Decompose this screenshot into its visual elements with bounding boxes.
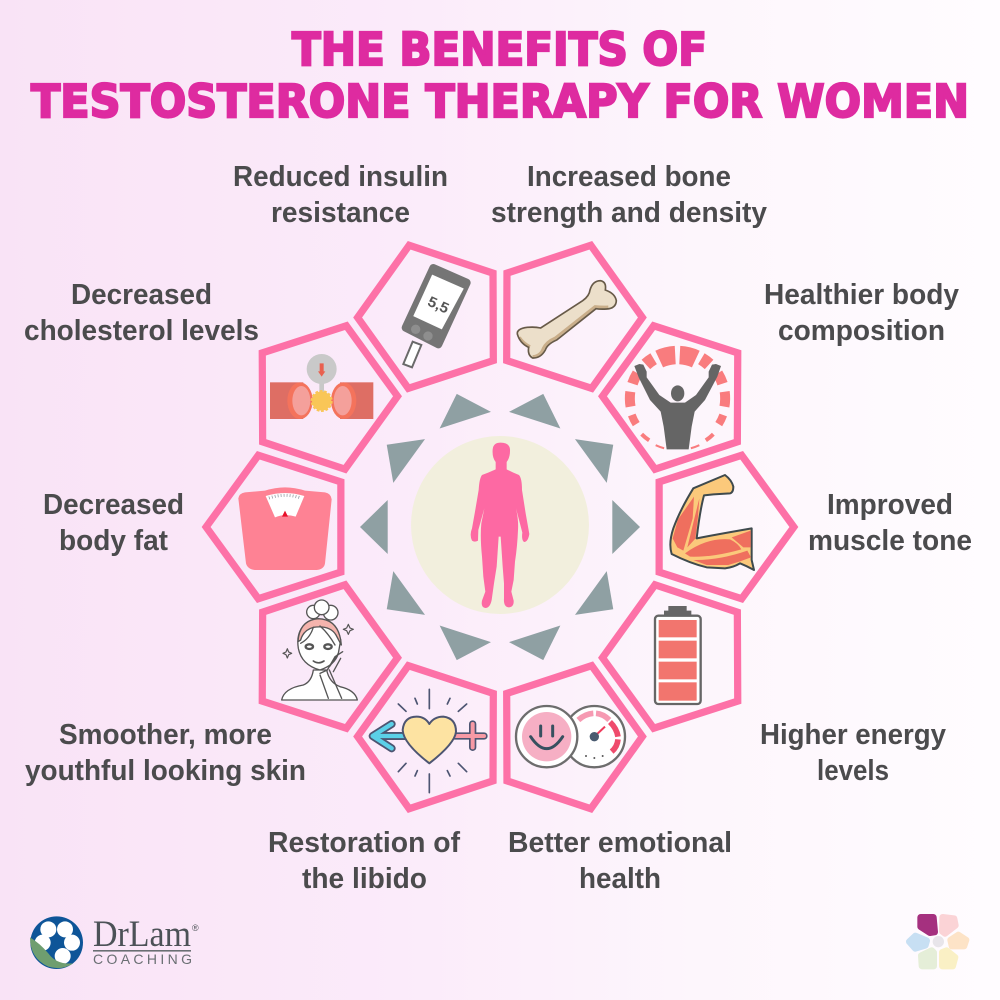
label: smoother skin [25, 719, 306, 787]
label: smoother skin: youthful looking skin [25, 755, 306, 787]
label: improved muscle tone: muscle tone [808, 525, 972, 557]
center circle [411, 436, 589, 614]
title: THE BENEFITS OF [292, 23, 707, 76]
icon: body composition [630, 355, 725, 449]
icon: heart and gender arrow [373, 689, 484, 793]
label: higher energy [760, 719, 946, 787]
label: increased bone strength: Increased bone [527, 161, 731, 193]
label: healthier body composition: composition [778, 315, 945, 347]
label: healthier body composition [764, 279, 959, 347]
label: decreased body fat: Decreased [43, 489, 184, 521]
title [31, 23, 969, 128]
label: decreased cholesterol: Decreased [71, 279, 212, 311]
label: better emotional health [508, 827, 732, 895]
icon: logo flower badge [30, 916, 83, 969]
logo: DrLam Coaching: DrLam [93, 914, 191, 955]
label: decreased cholesterol: cholesterol levels [24, 315, 259, 347]
label: improved muscle tone [808, 489, 972, 557]
label: decreased body fat [43, 489, 184, 557]
label: improved muscle tone: Improved [827, 489, 953, 521]
icon: cholesterol artery [270, 354, 373, 419]
label: higher energy: Higher energy [760, 719, 946, 751]
icon: flexed muscle [670, 475, 754, 570]
label: increased bone strength [491, 161, 767, 229]
icon: smiley and gauge [516, 706, 625, 767]
label: decreased cholesterol [24, 279, 259, 347]
label: restoration of libido: the libido [302, 863, 427, 895]
icon: glucose meter [403, 268, 467, 367]
icon: bathroom scale [238, 487, 332, 570]
icon: bone [517, 281, 616, 358]
label: healthier body composition: Healthier body [764, 279, 959, 311]
label: higher energy: levels [817, 755, 889, 787]
icon: battery [655, 606, 701, 704]
icon: glucose meter: 5,5 [425, 294, 451, 317]
title: TESTOSTERONE THERAPY FOR WOMEN [31, 75, 969, 128]
label: decreased body fat: body fat [59, 525, 168, 557]
label: restoration of libido: Restoration of [268, 827, 461, 859]
icon: woman touching face [282, 600, 357, 700]
icon: female body silhouette [471, 443, 529, 608]
triangle ring [360, 386, 640, 668]
pentagon ring [206, 223, 794, 831]
logo: DrLam Coaching: ® [192, 923, 199, 933]
label: reduced insulin resistance: Reduced insulin [233, 161, 448, 193]
logo: DrLam Coaching: COACHING [93, 951, 192, 967]
label: smoother skin: Smoother, more [59, 719, 272, 751]
label: increased bone strength: strength and density [491, 197, 767, 229]
label: better emotional health: health [579, 863, 661, 895]
label: better emotional health: Better emotional [508, 827, 732, 859]
label: reduced insulin resistance [233, 161, 448, 229]
logo: DrLam Coaching [30, 914, 199, 969]
icon: pastel flower [909, 917, 966, 966]
label: restoration of libido [268, 827, 461, 895]
label: reduced insulin resistance: resistance [271, 197, 410, 229]
